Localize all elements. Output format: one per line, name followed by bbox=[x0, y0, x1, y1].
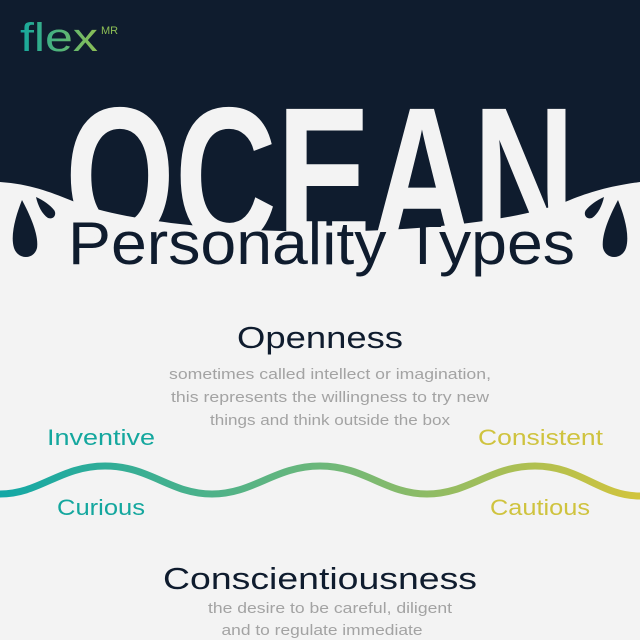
drops left bbox=[13, 197, 55, 257]
subtitle: Personality Types bbox=[68, 210, 575, 277]
description: conscientiousness: the desire to be careful, diligent bbox=[208, 600, 453, 617]
description: openness bbox=[169, 366, 491, 429]
labels: Curious bbox=[57, 495, 145, 520]
heading: Openness: Openness bbox=[237, 320, 403, 355]
header background bbox=[0, 0, 640, 232]
labels: Inventive bbox=[47, 425, 155, 450]
description: conscientiousness bbox=[208, 600, 453, 639]
description: openness: sometimes called intellect or imagination, bbox=[169, 366, 491, 383]
heading: Conscientiousness: Conscientiousness bbox=[163, 561, 477, 596]
drops right bbox=[585, 197, 627, 257]
labels bbox=[47, 425, 603, 520]
description: conscientiousness: and to regulate immediate bbox=[222, 622, 422, 639]
description: openness: things and think outside the box bbox=[210, 412, 451, 429]
labels: Cautious bbox=[490, 495, 590, 520]
logo: MR bbox=[101, 25, 118, 37]
logo bbox=[20, 16, 118, 60]
wave bbox=[0, 466, 640, 496]
logo: flex bbox=[20, 16, 98, 60]
labels: Consistent bbox=[478, 425, 603, 450]
description: openness: this represents the willingness to try new bbox=[171, 389, 489, 406]
